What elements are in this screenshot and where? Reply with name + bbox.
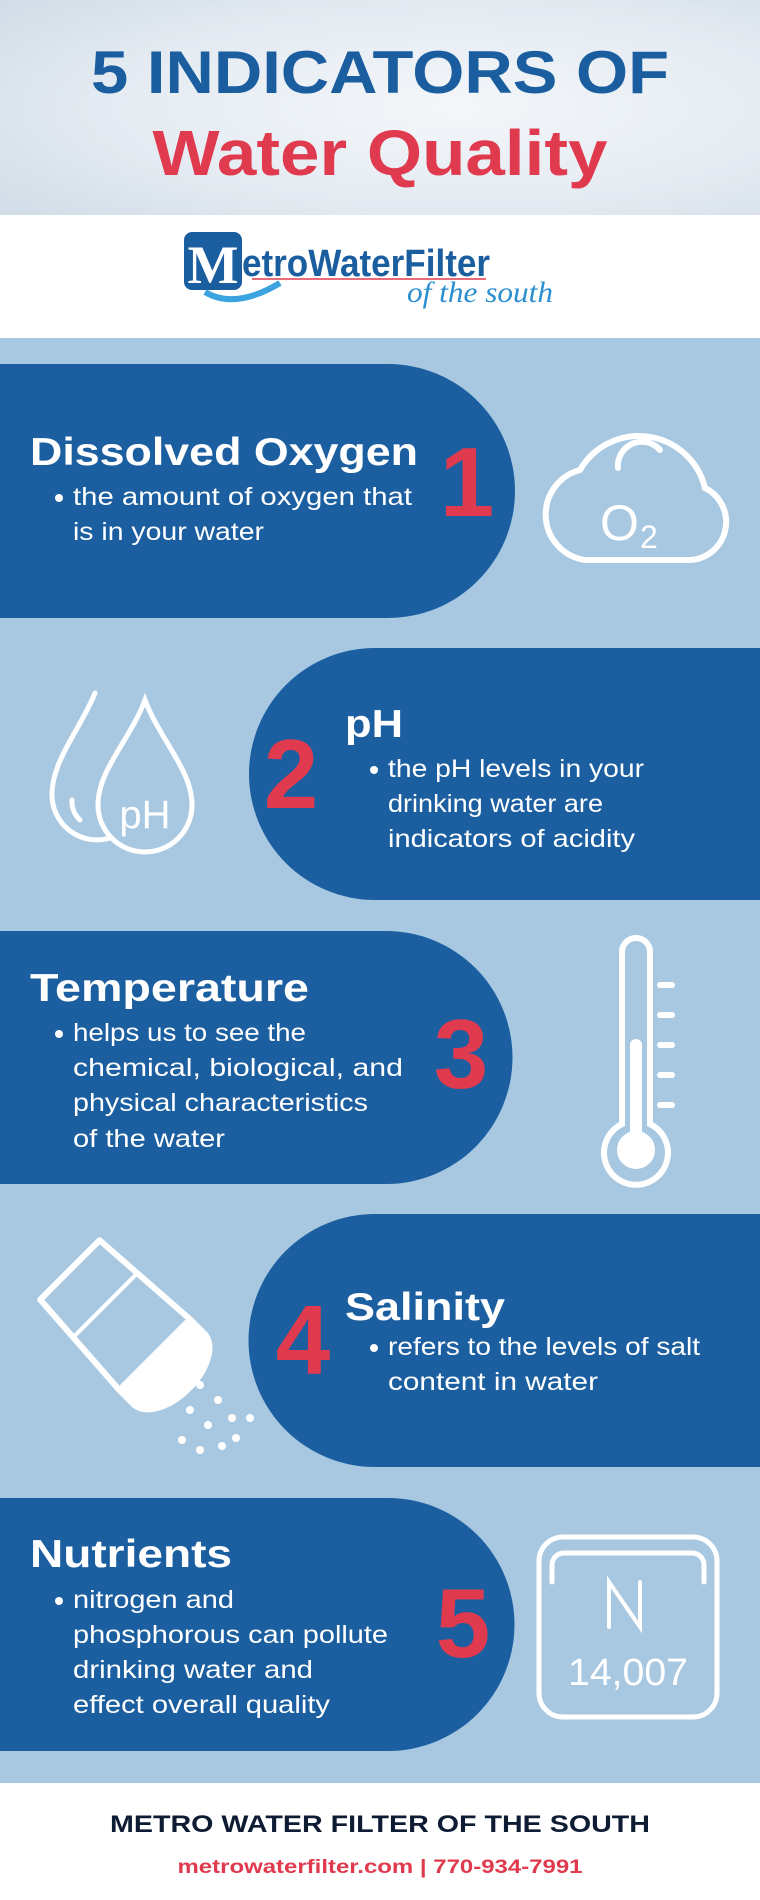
panel 2: pH: pH	[345, 703, 403, 746]
icon: salt shaker	[35, 1235, 254, 1454]
panel 1: dissolved oxygen: 1	[440, 427, 494, 537]
icon: O2 cloud: 2	[640, 519, 658, 555]
panel 4: salinity: Salinity	[345, 1286, 505, 1329]
panel 3: temperature: 3	[434, 999, 488, 1109]
panel 2: pH	[249, 648, 760, 900]
icon: thermometer	[604, 938, 672, 1185]
footer: METRO WATER FILTER OF THE SOUTH	[110, 1811, 650, 1838]
panel 5: nutrients: nitrogen and	[73, 1586, 234, 1614]
panel 3: temperature: chemical, biological, and	[73, 1054, 403, 1082]
panel 1: dissolved oxygen	[0, 364, 515, 618]
panel 5: nutrients: Nutrients	[30, 1533, 232, 1576]
main background	[0, 338, 760, 1783]
icon: O2 cloud: O	[600, 495, 639, 551]
panel 2: pH: indicators of acidity	[388, 825, 636, 853]
panel 1: dissolved oxygen: is in your water	[73, 518, 264, 546]
footer: metrowaterfilter.com | 770-934-7991	[178, 1857, 583, 1878]
header background	[0, 0, 760, 215]
title: 5 INDICATORS OF	[91, 39, 669, 106]
footer	[110, 1811, 650, 1878]
panel 4: salinity: refers to the levels of salt	[388, 1333, 700, 1361]
logo: M	[188, 235, 238, 295]
panel 4: salinity: 4	[276, 1285, 330, 1395]
icon: O2 cloud	[546, 436, 726, 560]
panel 1: dissolved oxygen: Dissolved Oxygen	[30, 431, 418, 474]
panel 3: temperature	[0, 931, 512, 1184]
icon: pH drops: pH	[119, 793, 171, 837]
panel 3: temperature: of the water	[73, 1125, 225, 1153]
panel 5: nutrients	[0, 1498, 515, 1751]
icon: nitrogen element box: 14,007	[568, 1652, 688, 1694]
panel 3: temperature: helps us to see the	[73, 1019, 306, 1047]
panel 5: nutrients: 5	[436, 1568, 490, 1678]
panel 3: temperature: physical characteristics	[73, 1089, 368, 1117]
panel 4: salinity	[249, 1214, 760, 1467]
panel 2: pH: drinking water are	[388, 790, 603, 818]
panel 2: pH: the pH levels in your	[388, 755, 644, 783]
panel 5: nutrients: drinking water and	[73, 1656, 313, 1684]
panel 4: salinity: content in water	[388, 1368, 598, 1396]
panel 5: nutrients: phosphorous can pollute	[73, 1621, 388, 1649]
logo	[184, 232, 553, 309]
panel 2: pH: 2	[264, 719, 318, 829]
icon: nitrogen element box	[539, 1537, 717, 1717]
logo: of the south	[407, 276, 553, 309]
title	[91, 39, 669, 189]
panel 5: nutrients: effect overall quality	[73, 1691, 331, 1719]
icon: pH drops	[52, 693, 192, 852]
panel 1: dissolved oxygen: the amount of oxygen that	[73, 483, 412, 511]
panel 3: temperature: Temperature	[30, 967, 309, 1010]
title: Water Quality	[152, 117, 608, 189]
logo: etroWaterFilter	[242, 243, 490, 285]
